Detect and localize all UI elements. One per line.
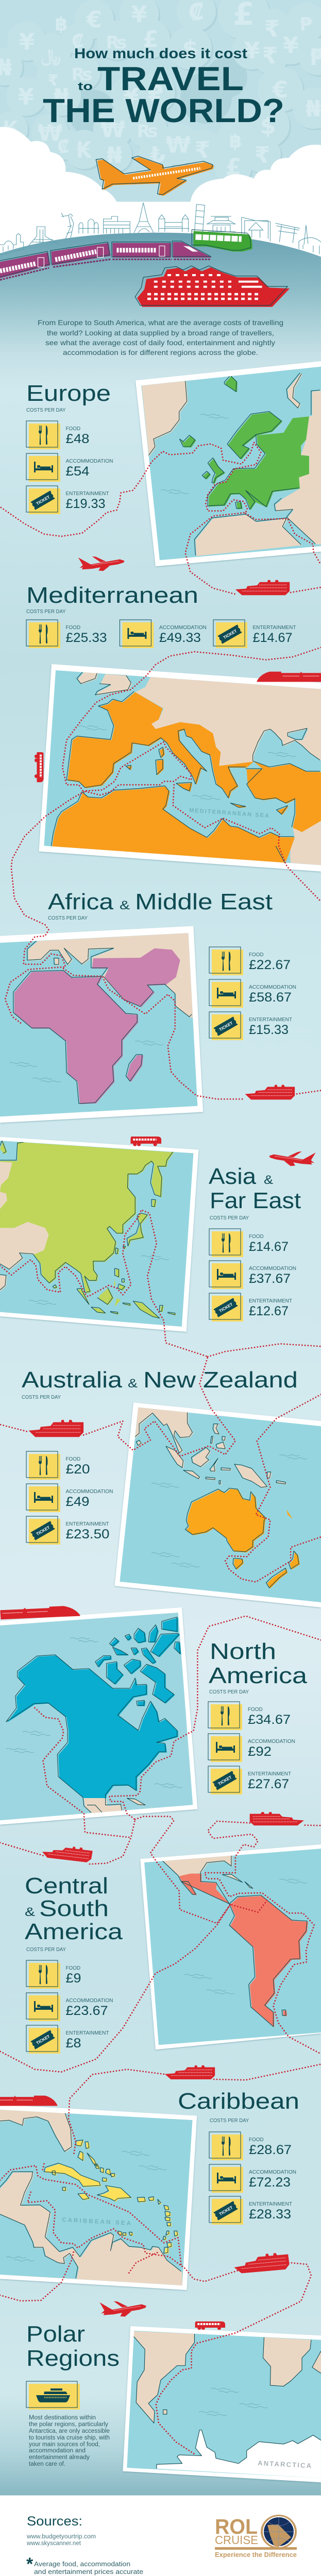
stat: accommodation <box>26 453 113 482</box>
heading: Central and South America <box>25 1873 123 1944</box>
heading: Africa and Middle East: & <box>120 899 130 912</box>
title: THE WORLD? <box>43 92 284 129</box>
heading: Africa and Middle East: Africa <box>48 889 114 914</box>
map: Europe <box>136 361 321 566</box>
stat: food <box>26 421 90 449</box>
stat: accommodation: ACCOMMODATION <box>66 1997 113 2004</box>
stat: entertainment: TICKET <box>36 1525 50 1536</box>
coins with currency symbols: ₩ <box>38 120 62 146</box>
coins with currency symbols: ₦ <box>306 96 321 122</box>
stat: entertainment: ENTERTAINMENT <box>249 1298 293 1304</box>
map: Polar regions <box>123 2326 321 2482</box>
coins with currency symbols: $ <box>260 113 276 139</box>
icon: ship near Mediterranean <box>235 580 290 595</box>
coins with currency symbols: ₱ <box>299 14 313 35</box>
heading: Polar Regions: Polar <box>26 2321 85 2347</box>
heading: Asia and Far East: Asia <box>209 1164 257 1189</box>
stat: food <box>208 1702 291 1730</box>
intro text <box>38 318 283 357</box>
heading: North America: America <box>209 1663 308 1688</box>
title: TRAVEL <box>97 60 244 97</box>
coins with currency symbols: ₹ <box>255 142 270 168</box>
icon: ship near Caribbean <box>165 2065 215 2079</box>
icon: cruise ship box <box>26 2381 80 2410</box>
icon: bus on Polar map edge <box>195 2321 225 2330</box>
map: Central and South America <box>140 1844 321 2049</box>
panel: Mediterranean costs <box>26 583 296 648</box>
logo: ROL Cruise <box>215 2515 297 2558</box>
coins with currency symbols: ₹ <box>262 43 278 69</box>
stat: accommodation <box>26 1993 113 2021</box>
coins with currency symbols: £ <box>226 154 241 180</box>
coins with currency symbols: ₦ <box>107 142 122 168</box>
title: How much does it cost <box>74 45 247 61</box>
panel: Europe costs <box>26 381 113 514</box>
title <box>43 45 284 129</box>
heading: Australia and New Zealand: & <box>128 1377 138 1391</box>
stat: entertainment <box>208 1766 292 1794</box>
coins with currency symbols: ₨ <box>72 64 92 85</box>
stat: food: FOOD <box>66 1965 80 1971</box>
stat: food: FOOD <box>248 1706 263 1713</box>
coins with currency symbols: ₩ <box>100 116 125 143</box>
stat: entertainment <box>209 1293 293 1321</box>
panel: Polar regions <box>26 2321 120 2467</box>
stat: entertainment <box>209 2196 293 2225</box>
heading: sources: Sources: <box>27 2514 82 2529</box>
text: source links: www.skyscanner.net <box>26 2540 81 2547</box>
stat: entertainment <box>26 2025 109 2054</box>
map label: Mediterranean Sea: MEDITERRANEAN SEA <box>189 807 269 819</box>
stat: entertainment: TICKET <box>217 1775 232 1786</box>
stat: entertainment: TICKET <box>36 2034 50 2045</box>
coins with currency symbols: ₹ <box>264 16 280 42</box>
coins with currency symbols: ₭ <box>3 116 19 143</box>
illustration: cruise ship <box>135 266 290 307</box>
intro text: the world? Looking at data supplied by a broad range of travellers, <box>47 329 274 337</box>
stat: entertainment: £8 <box>66 2036 81 2050</box>
coins with currency symbols: ₩ <box>166 132 191 158</box>
sky background with coins <box>0 0 321 227</box>
icon: bus on Asia map edge <box>130 1137 161 1146</box>
panel: Australia and New Zealand costs <box>22 1367 298 1545</box>
coins with currency symbols: ¥ <box>123 84 139 110</box>
stat: food: £48 <box>66 432 90 446</box>
stat: entertainment: ENTERTAINMENT <box>66 2030 109 2036</box>
stat: entertainment: £27.67 <box>248 1777 289 1791</box>
stat: entertainment: TICKET <box>223 629 238 640</box>
stat: entertainment: ENTERTAINMENT <box>249 2201 293 2207</box>
stat: accommodation: ACCOMMODATION <box>249 2169 296 2175</box>
stat: food: £20 <box>66 1462 90 1477</box>
text: polar regions note: taken care of. <box>29 2461 65 2467</box>
map: Mediterranean <box>39 664 321 872</box>
coins with currency symbols: ฿ <box>55 14 68 35</box>
logo: ROL Cruise: CRUISE <box>215 2533 258 2547</box>
heading: Africa and Middle East <box>48 889 273 914</box>
label: costs per day: COSTS PER DAY <box>210 1215 249 1221</box>
heading: Australia and New Zealand: New Zealand <box>143 1367 298 1393</box>
stat: food <box>209 947 291 975</box>
label: costs per day: COSTS PER DAY <box>26 608 66 615</box>
stat: accommodation <box>26 1484 113 1512</box>
intro text: From Europe to South America, what are the average costs of travelling <box>38 318 283 327</box>
text: polar regions note: the polar regions, particularly <box>29 2421 108 2428</box>
icon: bus on Mediterranean map edge <box>35 752 43 782</box>
small red vehicles along the route <box>0 556 321 2330</box>
stat: entertainment: £14.67 <box>252 631 293 645</box>
label: costs per day: COSTS PER DAY <box>209 1689 249 1695</box>
text: polar regions note: accommodation and <box>29 2448 86 2454</box>
stat: accommodation: ACCOMMODATION <box>66 458 113 464</box>
coins with currency symbols: ₽ <box>148 80 163 107</box>
heading: Australia and New Zealand <box>22 1367 298 1393</box>
stat: food: £28.67 <box>249 2143 292 2157</box>
stat: entertainment: £19.33 <box>66 497 105 511</box>
stat: accommodation: £92 <box>248 1744 272 1759</box>
stat: food: FOOD <box>66 426 80 432</box>
stat: food: FOOD <box>249 2137 264 2143</box>
stat: entertainment <box>209 1012 293 1040</box>
icon: plane near Asia <box>269 1151 316 1166</box>
coins with currency symbols: € <box>272 77 288 103</box>
heading: Caribbean: Caribbean <box>178 2089 299 2114</box>
title: to <box>78 80 93 93</box>
heading: North America <box>209 1639 308 1688</box>
stat: accommodation <box>209 979 296 1008</box>
stat: entertainment: ENTERTAINMENT <box>66 1521 109 1527</box>
stat: food: FOOD <box>249 1233 264 1240</box>
stat: accommodation: £58.67 <box>249 990 292 1005</box>
icon: ship near Polar regions <box>233 2252 290 2274</box>
heading: Central and South America: America <box>25 1919 123 1944</box>
text: polar regions note: your main sources of food, <box>29 2442 100 2448</box>
text: polar regions note: Most destinations within <box>29 2415 96 2421</box>
stat: accommodation: ACCOMMODATION <box>249 984 296 990</box>
heading: Europe: Europe <box>26 381 111 406</box>
text: polar regions note: Antarctica, are only accessible <box>29 2428 110 2434</box>
stat: entertainment: TICKET <box>36 495 50 506</box>
stat: food: FOOD <box>249 952 264 958</box>
stat: accommodation <box>209 1261 296 1289</box>
panel: Caribbean costs <box>178 2089 299 2225</box>
logo: ROL Cruise: ROL <box>215 2515 258 2538</box>
stat: accommodation: £37.67 <box>249 1272 291 1286</box>
icon: ship near Australia <box>29 1420 83 1437</box>
label: costs per day: COSTS PER DAY <box>210 2117 249 2124</box>
panel: North America costs <box>208 1639 308 1794</box>
heading: Asia and Far East: & <box>264 1173 273 1187</box>
coins with currency symbols: ¥ <box>244 38 260 64</box>
stat: entertainment: £28.33 <box>249 2207 291 2222</box>
stat: entertainment <box>26 1516 109 1545</box>
text: footnote: Average food, accommodation <box>34 2560 130 2568</box>
text: footnote: and entertainment prices accurate <box>34 2568 143 2575</box>
stat: accommodation <box>209 2164 296 2193</box>
icon: train on Caribbean map edge <box>0 2096 57 2106</box>
heading: Central and South America: South <box>39 1896 109 1921</box>
coins with currency symbols: ¥ <box>131 2 147 28</box>
stat: entertainment: £12.67 <box>249 1304 289 1318</box>
heading: Asia and Far East <box>209 1164 301 1213</box>
stat: food <box>26 620 107 648</box>
coins with currency symbols: ₺ <box>150 142 165 168</box>
stat: food <box>209 2132 292 2160</box>
text: polar regions note <box>29 2415 110 2467</box>
coins with currency symbols: ¥ <box>19 29 35 55</box>
heading: Polar Regions: Regions <box>26 2346 120 2371</box>
map: North America <box>0 1607 197 1825</box>
stat: entertainment: ENTERTAINMENT <box>248 1771 292 1777</box>
intro text: see what the average cost of daily food, entertainment and nightly <box>45 338 275 347</box>
stat: food <box>26 1960 81 1989</box>
coins with currency symbols: ₡ <box>72 31 84 52</box>
heading: North America: North <box>210 1639 276 1664</box>
label: costs per day: COSTS PER DAY <box>22 1394 61 1400</box>
stat: food: £25.33 <box>66 631 107 645</box>
stat: accommodation: £23.67 <box>66 2004 108 2018</box>
text: source links: www.budgetyourtrip.com <box>26 2534 96 2540</box>
coins with currency symbols: ₨ <box>106 32 127 53</box>
coins with currency symbols: ₡ <box>57 137 70 157</box>
stat: accommodation <box>120 620 207 648</box>
text: source links <box>26 2534 96 2547</box>
heading: Africa and Middle East: Middle East <box>135 889 273 914</box>
heading: Central and South America: Central <box>25 1873 108 1899</box>
coins with currency symbols: ₹ <box>195 137 210 163</box>
stat: food: FOOD <box>66 624 80 631</box>
map: Caribbean <box>0 2105 197 2290</box>
label: costs per day: COSTS PER DAY <box>26 407 66 413</box>
stat: entertainment: ENTERTAINMENT <box>252 624 296 631</box>
coins with currency symbols: ¥ <box>283 32 299 59</box>
text: polar regions note: entertainment already <box>29 2454 90 2461</box>
stat: entertainment: ENTERTAINMENT <box>66 490 109 497</box>
stat: accommodation: ACCOMMODATION <box>249 1265 296 1272</box>
heading: Australia and New Zealand: Australia <box>22 1367 123 1393</box>
clouds <box>0 127 321 241</box>
text: footnote <box>26 2554 143 2576</box>
skyline of landmarks <box>0 202 321 255</box>
stat: entertainment: ENTERTAINMENT <box>249 1016 293 1023</box>
map: Africa and Middle East <box>0 926 203 1123</box>
stat: food: £34.67 <box>248 1713 291 1727</box>
stat: entertainment <box>213 620 296 648</box>
heading: Mediterranean: Mediterranean <box>26 583 198 608</box>
logo: ROL Cruise: Experience the Difference <box>215 2551 297 2558</box>
stat: food <box>209 1229 289 1257</box>
heading: Central and South America: & <box>25 1905 35 1919</box>
stat: entertainment: TICKET <box>218 2205 233 2216</box>
icon: ship near Asia <box>245 1085 295 1099</box>
icon: train near Mediterranean map <box>257 672 321 682</box>
coins with currency symbols: ₨ <box>137 121 158 142</box>
illustration: purple train <box>0 241 212 280</box>
text: footnote: * <box>26 2554 33 2574</box>
coins with currency symbols: ¥ <box>18 84 34 110</box>
stat: accommodation <box>208 1734 295 1762</box>
dotted travel routes <box>0 442 321 2454</box>
coins with currency symbols: ₭ <box>76 137 92 163</box>
icon: ship near South America map <box>250 1812 304 1825</box>
icon: train on North America map edge <box>0 1605 80 1619</box>
stat: accommodation: £72.23 <box>249 2175 291 2190</box>
panel: Central and South America costs <box>25 1873 123 2054</box>
stat: food: £22.67 <box>249 958 291 972</box>
stat: entertainment: TICKET <box>218 1021 233 1032</box>
coins with currency symbols: ﷼ <box>41 45 61 66</box>
coins with currency symbols <box>0 0 321 187</box>
footer panel <box>0 2496 321 2576</box>
stat: accommodation: ACCOMMODATION <box>159 624 207 631</box>
map: Asia and Far East <box>0 1137 198 1332</box>
coins with currency symbols: £ <box>143 26 158 53</box>
stat: accommodation: £49.33 <box>159 631 201 645</box>
stat: accommodation: £54 <box>66 464 90 479</box>
illustration: green bus <box>192 230 252 251</box>
coins with currency symbols: ₹ <box>48 72 58 90</box>
stat: entertainment: £23.50 <box>66 1527 109 1541</box>
icon: plane near Polar regions <box>99 2301 146 2317</box>
heading: Asia and Far East: Far East <box>210 1188 301 1213</box>
stat: accommodation: ACCOMMODATION <box>248 1738 295 1744</box>
stat: food <box>26 1451 90 1480</box>
coins with currency symbols: $ <box>182 36 198 62</box>
heading: Polar Regions <box>26 2321 120 2371</box>
panel: Africa and Middle East costs <box>48 889 296 1040</box>
map: Australia and New Zealand <box>114 1402 321 1607</box>
icon: ship near Central America <box>41 1843 93 1863</box>
stat: food: £9 <box>66 1971 81 1986</box>
stat: food: £14.67 <box>249 1240 289 1254</box>
stat: accommodation: £49 <box>66 1495 90 1509</box>
panel: Asia and Far East costs <box>209 1164 301 1321</box>
stat: entertainment: £15.33 <box>249 1023 289 1037</box>
icon: plane near Mediterranean <box>78 556 125 571</box>
coins with currency symbols: ₦ <box>54 84 69 110</box>
text: polar regions note: to tourists via cruise ship, with <box>29 2435 110 2441</box>
coins with currency symbols: ฿ <box>229 131 242 152</box>
label: costs per day: COSTS PER DAY <box>26 1946 66 1953</box>
coins with currency symbols: € <box>86 7 102 33</box>
stat: entertainment <box>26 486 109 514</box>
label: costs per day: COSTS PER DAY <box>48 915 88 921</box>
map label: Caribbean Sea: CARIBBEAN SEA <box>62 2217 131 2227</box>
stat: food: FOOD <box>66 1456 80 1462</box>
intro text: accommodation is for different regions across the globe. <box>63 348 258 357</box>
map label: Antarctica: ANTARCTICA <box>258 2459 312 2469</box>
illustration: orange plane <box>96 156 214 196</box>
stat: entertainment: TICKET <box>218 1302 233 1313</box>
stat: accommodation: ACCOMMODATION <box>66 1488 113 1495</box>
